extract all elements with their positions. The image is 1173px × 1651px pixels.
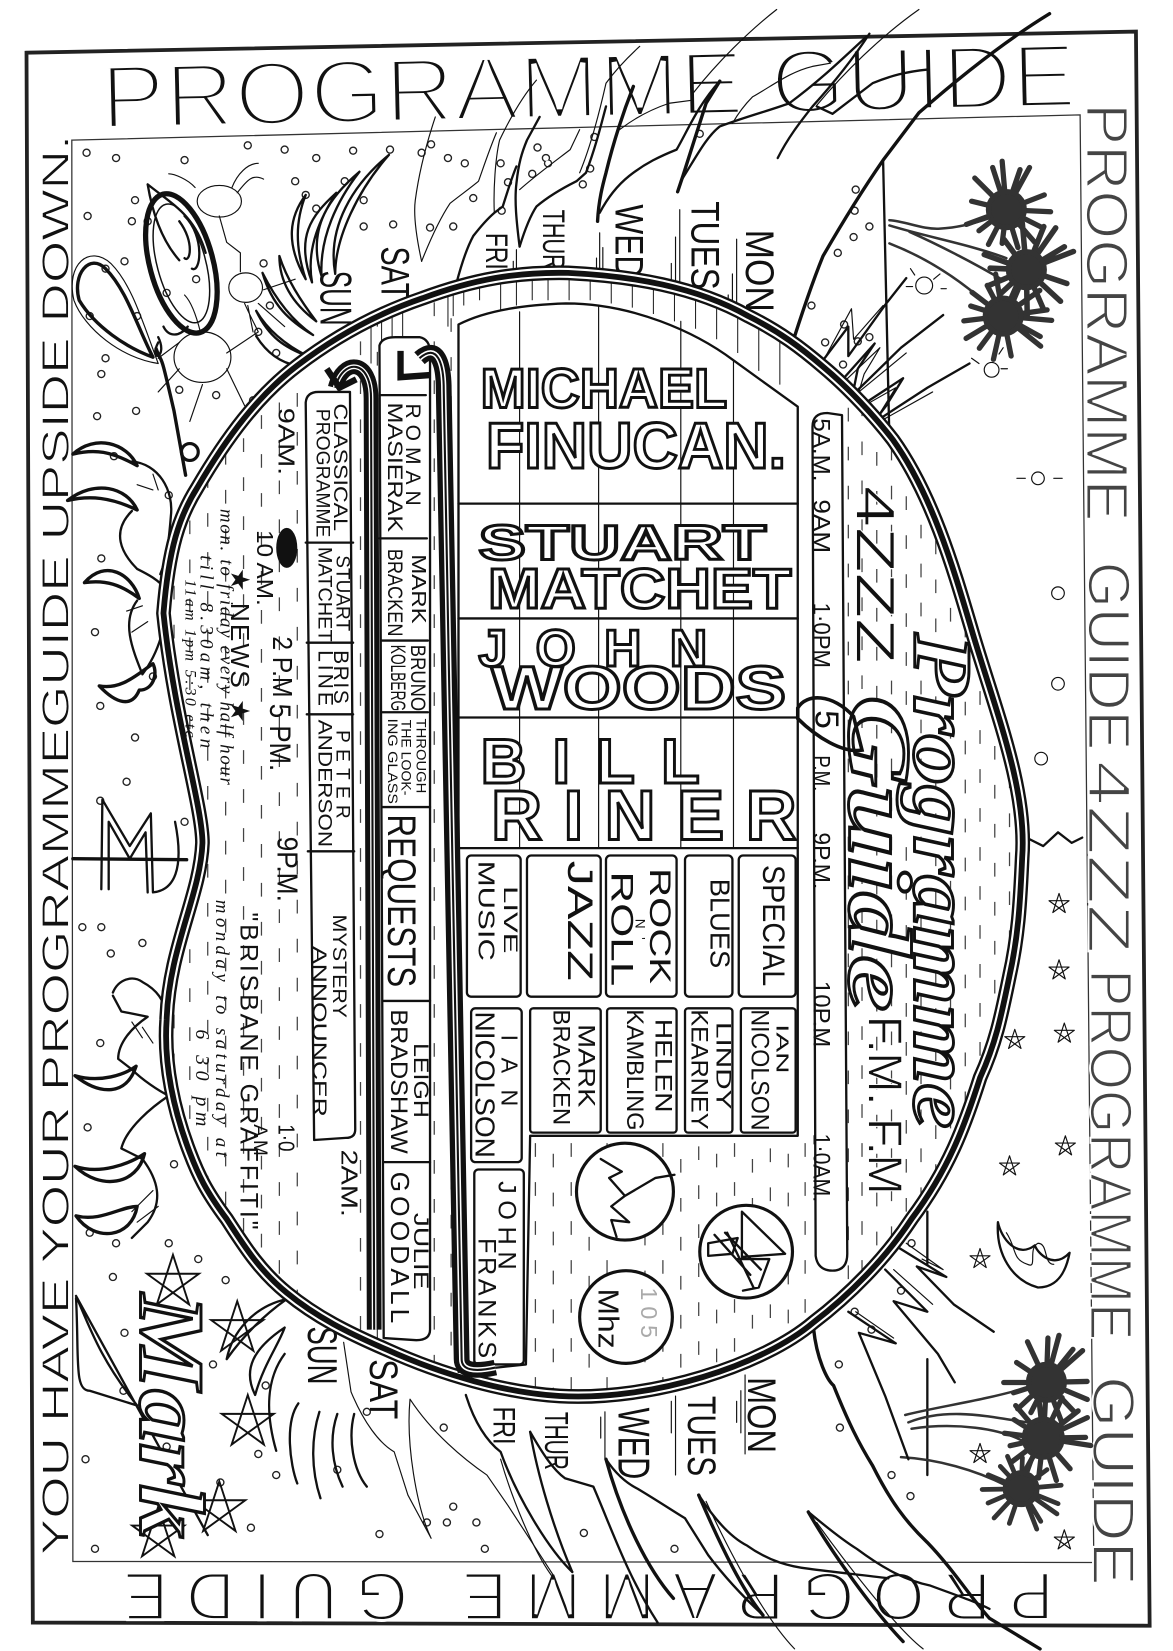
panel: time strip: 5A.M.	[808, 418, 835, 481]
panel: genre presenter cells: LINDY	[712, 1022, 735, 1109]
panel: genre cells: JAZZ	[560, 861, 598, 981]
times and news text block: mon. to friday every half hour	[215, 509, 236, 786]
panel: first schedule column	[306, 392, 355, 1140]
panel: time strip: 1·0PM	[808, 603, 835, 668]
panel: genre presenter cells	[469, 1008, 796, 1364]
panel: first schedule column: MYSTERY	[328, 915, 349, 1018]
panel: genre presenter cells: KAMBLING	[621, 1009, 648, 1131]
day labels: bottom: SAT	[361, 1359, 405, 1419]
times and news text block: 10 AM.	[252, 530, 278, 606]
panel: second schedule column: MASIERAK	[383, 402, 406, 532]
day labels: top: SAT	[373, 247, 417, 300]
panel: first schedule column: STUART	[331, 555, 352, 632]
times and news text block: 2 P.M	[267, 636, 298, 697]
presenter names: BILL	[481, 727, 700, 797]
panel: second schedule column: ING GLASS	[385, 719, 400, 804]
left column message: YOU HAVE YOUR PROGRAMMEGUIDE UPSIDE DOWN.	[36, 135, 78, 1555]
panel: genre cells: BLUES	[704, 879, 735, 968]
panel: first schedule column: MATCHET	[313, 547, 334, 642]
panel: time strip: 10P.M	[808, 981, 835, 1047]
icon: pentagram stars	[132, 1255, 274, 1556]
day labels: top: TUES	[682, 201, 726, 290]
presenter names: STUART	[479, 515, 766, 570]
fronds: top sun rays	[256, 155, 389, 366]
signature: bottom left script	[76, 1292, 222, 1538]
panel: genre presenter cells: NICOLSON	[469, 1011, 500, 1158]
panel: genre presenter cells: IAN	[773, 1024, 793, 1074]
day labels: bottom: SUN	[299, 1326, 346, 1384]
day labels: top: FRI	[479, 233, 515, 270]
times and news text block: 5 PM.	[263, 704, 296, 771]
panel: genre presenter cells: IAN	[497, 1035, 523, 1106]
panel: central blob schedule	[163, 263, 1023, 1401]
flames: bottom day rays	[344, 1212, 1040, 1649]
panel: genre presenter cells: FRANKS	[473, 1238, 501, 1358]
heading: top programme guide: PROGRAMME GUIDE	[99, 25, 1077, 149]
times and news text block: ★ NEWS ★	[225, 568, 255, 723]
panel: time strip: 1·0AM.	[808, 1134, 835, 1202]
panel: first schedule column: CLASSICAL	[329, 404, 350, 531]
times and news text block: AM	[249, 1124, 270, 1156]
panel: second schedule column: BRADSHAW	[385, 1009, 412, 1154]
icon: small suns and stars	[906, 269, 1082, 1549]
right column repeated guide text: 4ZZZ	[1076, 761, 1142, 954]
icon: top palm trees	[889, 161, 1095, 368]
panel: time strip: P.M.	[808, 755, 835, 791]
icon: bottom lightning bolts	[848, 1243, 994, 1459]
signature: bottom left script: Mark	[119, 1292, 222, 1538]
day labels: bottom: FRI	[486, 1407, 522, 1444]
day labels: top: THUR	[536, 210, 572, 270]
times and news text block: till 8.30am, then	[195, 555, 216, 748]
panel: genre cells: N'	[632, 919, 647, 940]
panel: genre cells: SPECIAL	[756, 865, 792, 986]
presenter names	[479, 357, 797, 855]
times and news text block	[182, 408, 363, 1230]
panel: genre presenter cells: KEARNEY	[685, 1009, 712, 1129]
heading: bottom inverted programme guide: PROGRAMME GUIDE	[123, 1558, 1054, 1633]
script title: programme guide: 5	[808, 710, 846, 729]
channel: left double track with arrow	[327, 367, 374, 1330]
panel: second schedule column: KOLBERG	[386, 645, 409, 711]
icon: Mhz circle	[580, 1271, 672, 1363]
panel: second schedule column: THROUGH	[413, 719, 428, 793]
flames: top day rays	[415, 9, 1050, 439]
day labels: top: WED	[606, 204, 650, 278]
panel: main presenter table	[458, 303, 798, 1372]
panel: first schedule column: ANDERSON	[313, 720, 334, 847]
channel: right double track with arrow	[420, 353, 495, 1370]
panel: time strip: 9P.M.	[808, 832, 835, 889]
panel: genre cells: MUSIC	[474, 861, 500, 961]
day labels: top: SUN	[310, 271, 359, 326]
script title: programme guide	[798, 632, 988, 1128]
times and news text block: 9P.M.	[270, 837, 302, 902]
presenter names: FINUCAN.	[486, 409, 786, 482]
right column repeated guide text: PROGRAMME	[1078, 969, 1144, 1340]
panel: second schedule column: JULIE	[409, 1213, 432, 1290]
claws: lower paw	[75, 979, 169, 1238]
panel: genre cells: ROCK	[643, 868, 676, 985]
icon: moon	[998, 1222, 1070, 1288]
fronds: bottom sun rays	[227, 1299, 367, 1498]
panel: genre presenter cells: NICOLSON	[745, 1009, 773, 1131]
panel: genre presenter cells: MARK	[573, 1024, 600, 1107]
panel: time strip: 9AM	[808, 499, 835, 553]
right column repeated guide text	[1073, 103, 1146, 1586]
day labels: bottom	[299, 1326, 783, 1479]
day labels: bottom: TUES	[679, 1396, 723, 1476]
scattered planet dots background	[82, 134, 912, 1549]
panel: genre cells: LIVE	[499, 886, 520, 954]
icon: Mhz circle: 105	[636, 1288, 662, 1338]
day labels: bottom: THUR	[537, 1412, 575, 1470]
creatures: top left line drawings	[158, 163, 295, 421]
panel: genre cells	[467, 856, 796, 997]
panel: first schedule column: ANNOUNCER	[308, 946, 329, 1117]
script title: programme guide: Programme	[897, 632, 988, 1128]
day labels: bottom: WED	[609, 1408, 658, 1479]
station label 4ZZZ: 4ZZZ	[845, 486, 907, 664]
day labels: top	[310, 201, 781, 326]
presenter names: MATCHET	[488, 557, 792, 621]
icon: top lightning bolts	[814, 278, 969, 424]
panel: second schedule column: BRACKEN	[383, 549, 406, 636]
presenter names: RINER	[491, 776, 797, 855]
panel: second schedule column: BRUNO	[406, 645, 429, 711]
right column repeated guide text: PROGRAMME	[1073, 103, 1139, 522]
panel: genre presenter cells: BRACKEN	[547, 1009, 574, 1125]
panel: first schedule column: PROGRAMME	[311, 409, 332, 537]
day labels: top: MON	[737, 230, 781, 312]
claws: upper paw	[68, 443, 171, 702]
panel: time strip	[808, 413, 847, 1271]
arrow into column	[401, 351, 430, 377]
frequency label F.M.: F.M. F.M	[857, 1016, 911, 1195]
script title: programme guide: Guide	[829, 695, 927, 1011]
icon: bottom palm trees	[901, 1323, 1105, 1547]
panel: genre presenter cells: HELEN	[650, 1019, 677, 1113]
icon: lightning circle	[576, 1143, 674, 1240]
right column repeated guide text: GUIDE	[1080, 1376, 1146, 1586]
times and news text block: 6 30 pm	[191, 1029, 213, 1126]
inner frame line	[72, 115, 1094, 1562]
icon: Mhz circle: Mhz	[592, 1289, 624, 1349]
right column repeated guide text: GUIDE	[1076, 562, 1142, 750]
panel: first schedule column: LINE	[313, 650, 336, 706]
day labels: bottom: MON	[739, 1377, 783, 1453]
icon: MP monogram	[73, 800, 187, 892]
times and news text block: monday to saturday at	[211, 900, 232, 1158]
panel: first schedule column: PETER	[331, 730, 352, 819]
times and news text block: 1·0	[273, 1124, 299, 1152]
panel: first schedule column: BRIS	[329, 650, 352, 704]
panel: genre cells: ROLL	[604, 871, 640, 986]
times and news text block: "BRISBANE GRAFFITI"	[234, 912, 262, 1230]
panel: second schedule column: ROMAN	[401, 404, 424, 506]
panel: second schedule column: MARK	[407, 554, 429, 625]
icon: tree circle	[700, 1205, 792, 1298]
panel: second schedule column: GOODALL	[385, 1172, 415, 1323]
panel: second schedule column	[379, 337, 432, 1340]
presenter names: JOHN	[479, 619, 707, 677]
presenter names: MICHAEL	[481, 357, 727, 420]
times and news text block: 2AM.	[337, 1149, 363, 1217]
panel: genre presenter cells: JOHN	[493, 1181, 521, 1270]
ornament: top left script flourish	[72, 184, 230, 475]
panel: second schedule column: LEIGH	[409, 1043, 432, 1118]
times and news text block: 9AM.	[273, 408, 299, 475]
panel: second schedule column: REQUESTS	[379, 814, 423, 987]
presenter names: WOODS	[491, 654, 786, 722]
panel: second schedule column: THE LOOK-	[399, 720, 414, 795]
times and news text block: 11am 1pm 5:30 etc.	[182, 579, 199, 744]
